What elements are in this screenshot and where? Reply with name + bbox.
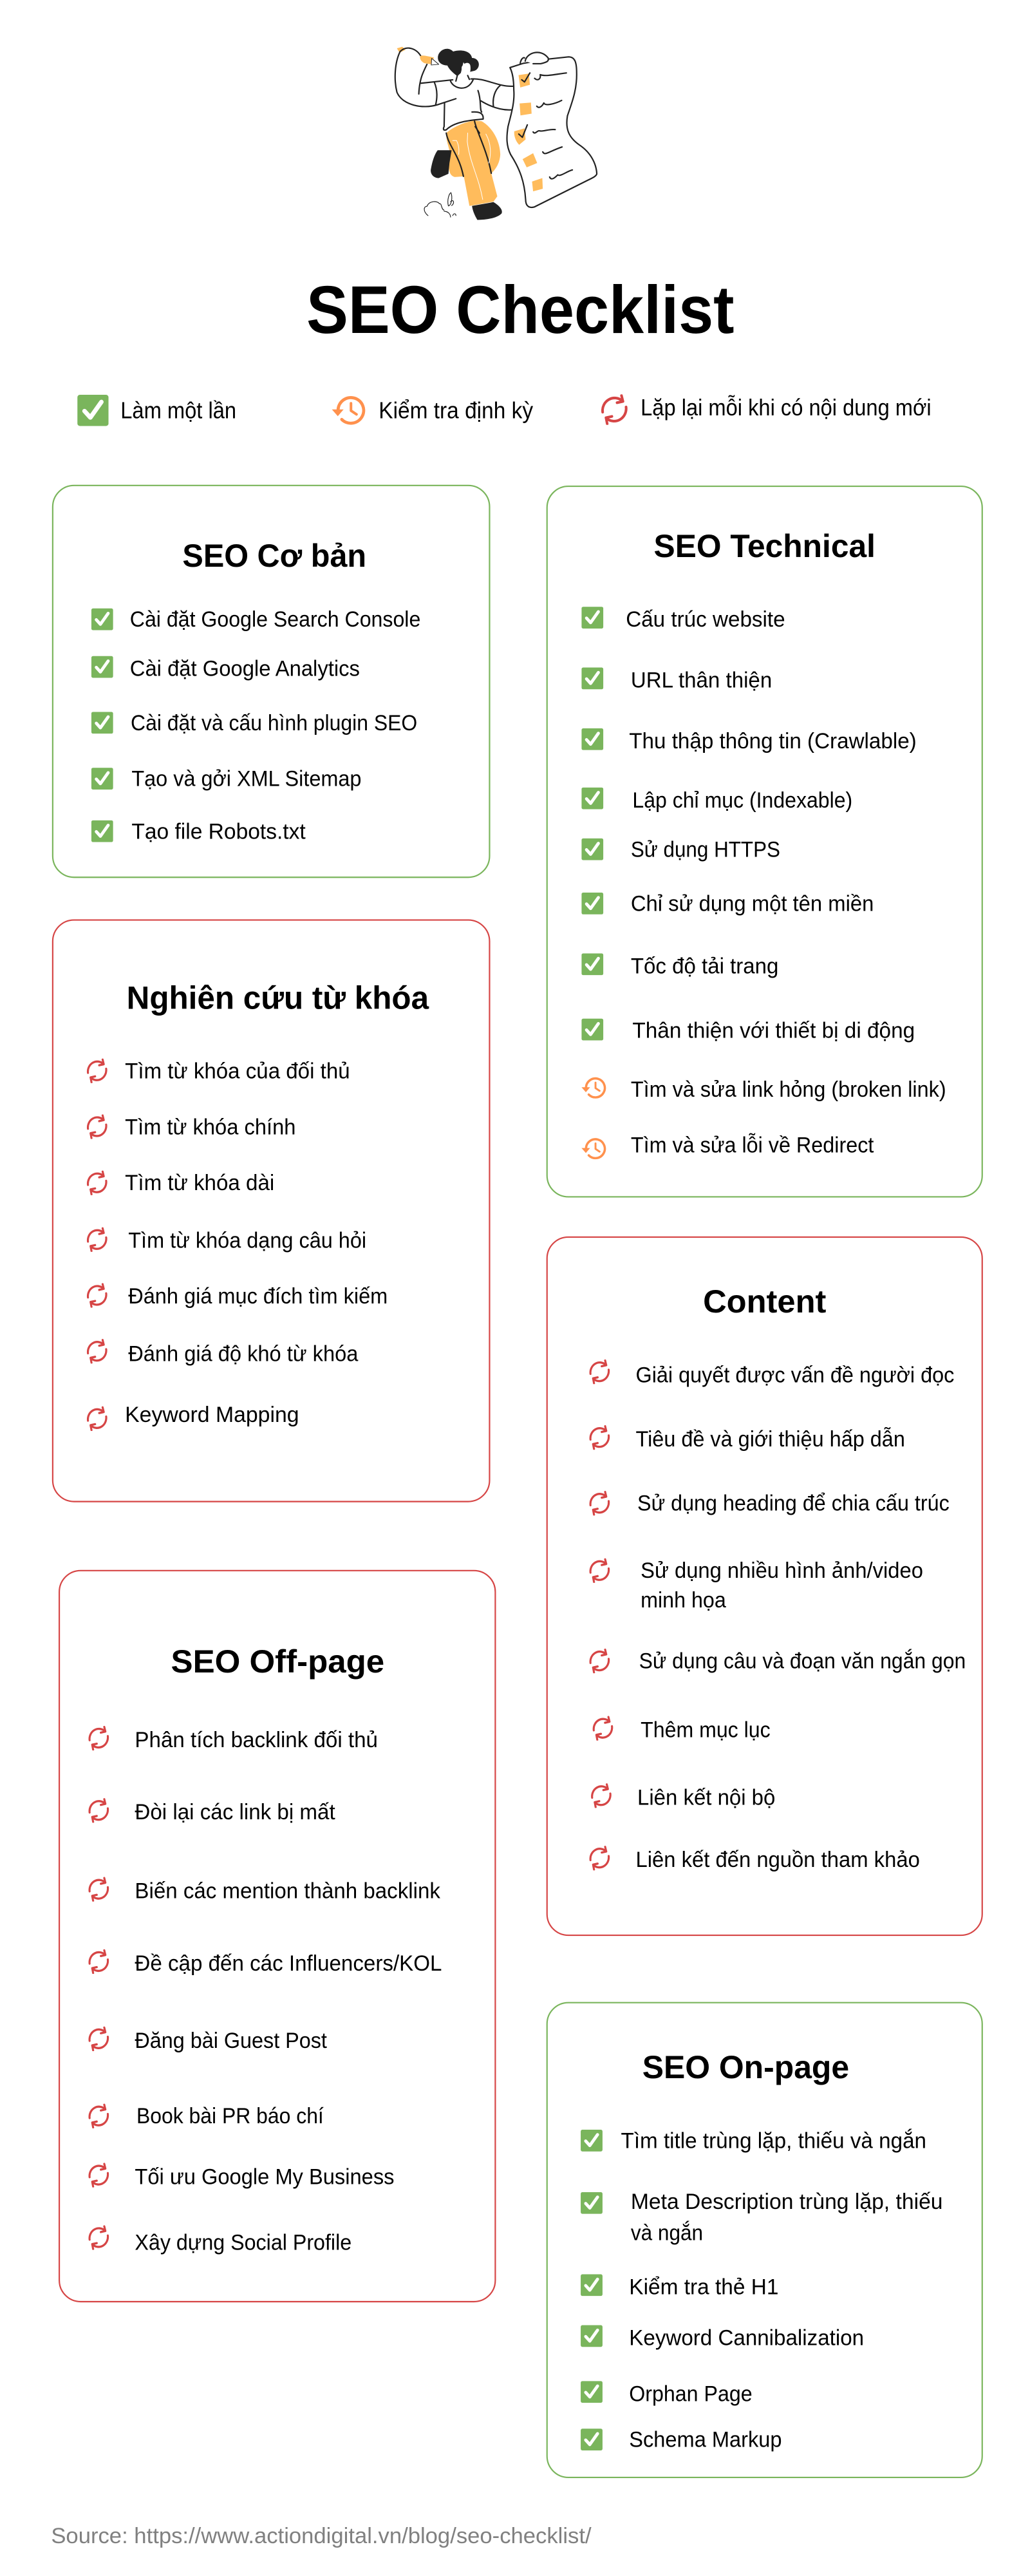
panel: Nghiên cứu từ khóa	[53, 920, 489, 1502]
item: Tìm từ khóa dài	[125, 1171, 274, 1195]
legend: one time	[77, 395, 236, 426]
item: Phân tích backlink đối thủ	[135, 1728, 378, 1752]
item: Đề cập đến các Influencers/KOL	[135, 1951, 442, 1976]
item: Lập chỉ mục (Indexable)	[632, 788, 852, 813]
item: Cài đặt Google Analytics	[130, 657, 360, 681]
item: Tìm title trùng lặp, thiếu và ngắn	[621, 2128, 926, 2153]
item	[594, 1717, 771, 1743]
item: Book bài PR báo chí	[136, 2104, 324, 2128]
item: Tối ưu Google My Business	[135, 2165, 394, 2190]
heading: SEO On-page	[642, 2049, 849, 2085]
item: Sử dụng heading để chia cấu trúc	[637, 1492, 950, 1516]
item: Liên kết nội bộ	[637, 1785, 775, 1810]
item: minh họa	[641, 1588, 726, 1613]
heading: SEO Technical	[654, 528, 876, 564]
heading: Content	[703, 1283, 827, 1320]
item: Sử dụng câu và đoạn văn ngắn gọn	[639, 1649, 966, 1674]
panel: SEO Technical	[547, 486, 982, 1197]
illustration: person holding a checklist	[395, 47, 597, 220]
item: Schema Markup	[629, 2428, 782, 2452]
item: Keyword Cannibalization	[629, 2326, 864, 2351]
item: Kiểm tra thẻ H1	[629, 2275, 778, 2299]
item: và ngắn	[631, 2221, 703, 2245]
heading: Nghiên cứu từ khóa	[127, 980, 429, 1016]
item: Tìm và sửa lỗi về Redirect	[631, 1133, 874, 1158]
item: Cấu trúc website	[626, 607, 785, 632]
item	[581, 2381, 753, 2406]
item: URL thân thiện	[631, 668, 772, 693]
item: Keyword Mapping	[125, 1403, 299, 1427]
item: Orphan Page	[629, 2382, 753, 2406]
item: Thêm mục lục	[641, 1718, 771, 1743]
legend: periodic: Kiểm tra định kỳ	[379, 398, 533, 424]
panel: Content	[547, 1237, 982, 1935]
legend	[77, 395, 932, 426]
heading: SEO Cơ bản	[182, 538, 366, 574]
item: Tìm từ khóa chính	[125, 1115, 295, 1139]
item: Sử dụng nhiều hình ảnh/video	[641, 1558, 923, 1583]
title: SEO Checklist	[306, 272, 735, 348]
item: Đòi lại các link bị mất	[135, 1800, 335, 1824]
panel: SEO Cơ bản	[53, 486, 489, 877]
item: Tìm từ khóa dạng câu hỏi	[128, 1228, 366, 1253]
panel: SEO Off-page	[59, 1571, 495, 2302]
item	[590, 1558, 923, 1613]
source note: Source: https://www.actiondigital.vn/blog/seo-checklist/	[51, 2524, 592, 2548]
item: Đánh giá độ khó từ khóa	[128, 1342, 359, 1367]
item: Tiêu đề và giới thiệu hấp dẫn	[635, 1427, 905, 1452]
panel: SEO On-page	[547, 2003, 982, 2477]
item	[89, 2226, 351, 2255]
item: Thân thiện với thiết bị di động	[632, 1019, 915, 1043]
item: Xây dựng Social Profile	[135, 2231, 351, 2255]
heading: SEO Off-page	[171, 1643, 384, 1680]
item: Tạo file Robots.txt	[131, 819, 306, 844]
item: Liên kết đến nguồn tham khảo	[635, 1848, 920, 1872]
item: Tìm từ khóa của đối thủ	[125, 1059, 350, 1084]
item: Sử dụng HTTPS	[631, 837, 780, 862]
legend: repeat: Lặp lại mỗi khi có nội dung mới	[641, 395, 932, 421]
item: Chỉ sử dụng một tên miền	[631, 892, 874, 916]
item: Giải quyết được vấn đề người đọc	[635, 1363, 954, 1388]
item: Đăng bài Guest Post	[135, 2029, 327, 2053]
item: Thu thập thông tin (Crawlable)	[629, 729, 917, 753]
item: Đánh giá mục đích tìm kiếm	[128, 1284, 388, 1309]
item: Cài đặt và cấu hình plugin SEO	[131, 711, 417, 735]
item: Biến các mention thành backlink	[135, 1879, 440, 1904]
item: Cài đặt Google Search Console	[130, 607, 420, 632]
item: Meta Description trùng lặp, thiếu	[631, 2190, 943, 2214]
item: Tạo và gởi XML Sitemap	[131, 767, 361, 791]
item: Tốc độ tải trang	[631, 954, 778, 978]
item: Tìm và sửa link hỏng (broken link)	[631, 1077, 946, 1102]
item	[581, 2190, 943, 2245]
legend: one time: Làm một lần	[120, 398, 236, 424]
